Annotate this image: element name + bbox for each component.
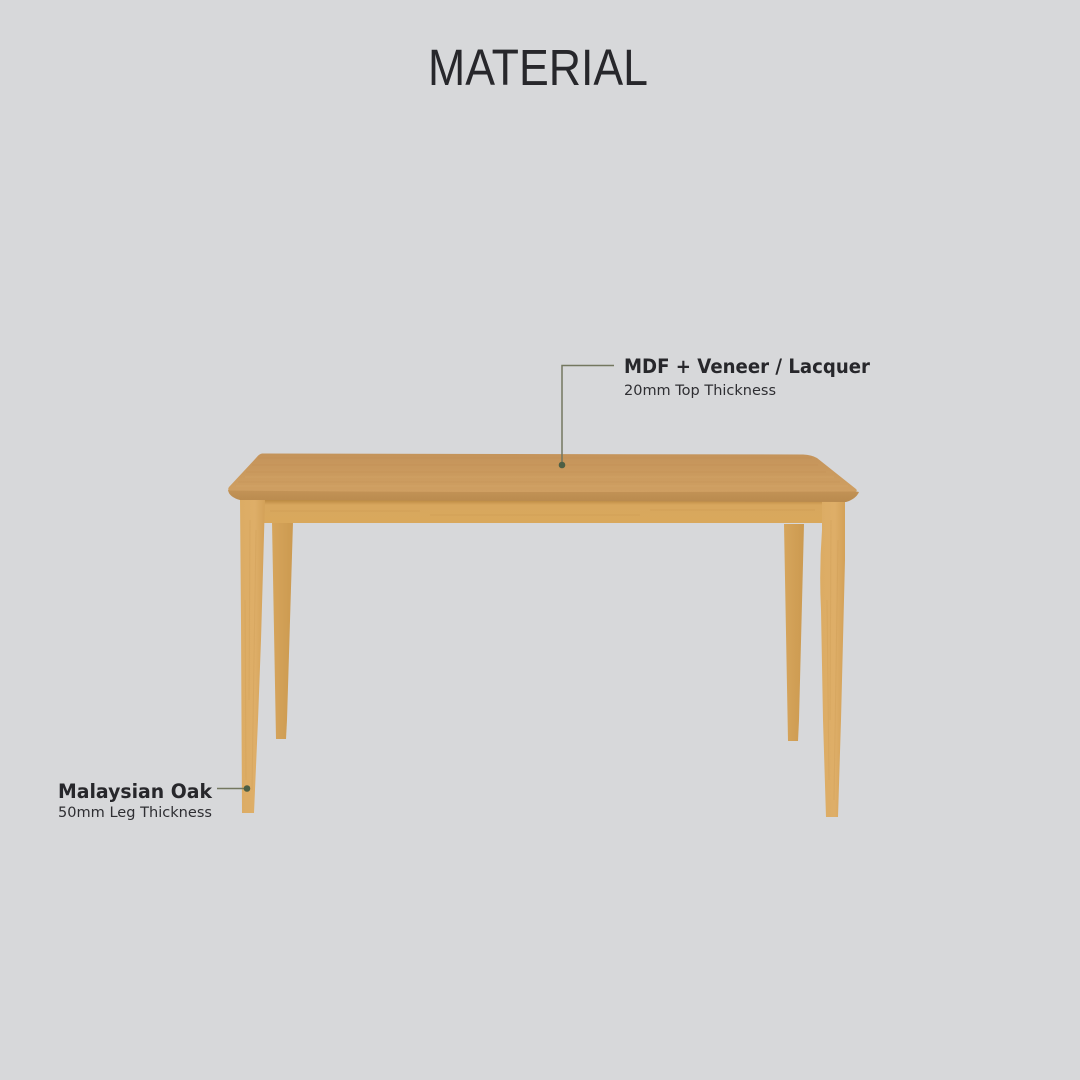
back left leg bbox=[272, 522, 293, 739]
subtext: 20mm Top Thickness bbox=[624, 383, 776, 399]
leader line bbox=[562, 366, 614, 465]
table top edge bbox=[228, 480, 859, 502]
callout: table top bbox=[559, 355, 870, 468]
table top surface bbox=[228, 454, 857, 492]
heading: MDF + Veneer / Lacquer bbox=[624, 355, 870, 378]
front right leg bbox=[820, 501, 845, 817]
callout: legs bbox=[58, 780, 250, 821]
leader line bbox=[217, 788, 247, 790]
title: MATERIAL bbox=[428, 39, 648, 96]
marker dot bbox=[559, 462, 565, 468]
heading: Malaysian Oak bbox=[58, 780, 213, 803]
subtext: 50mm Leg Thickness bbox=[58, 805, 212, 821]
apron bbox=[264, 500, 822, 523]
front left leg bbox=[240, 500, 265, 813]
back right leg bbox=[784, 524, 804, 741]
table illustration bbox=[228, 454, 859, 817]
marker dot bbox=[244, 785, 250, 792]
